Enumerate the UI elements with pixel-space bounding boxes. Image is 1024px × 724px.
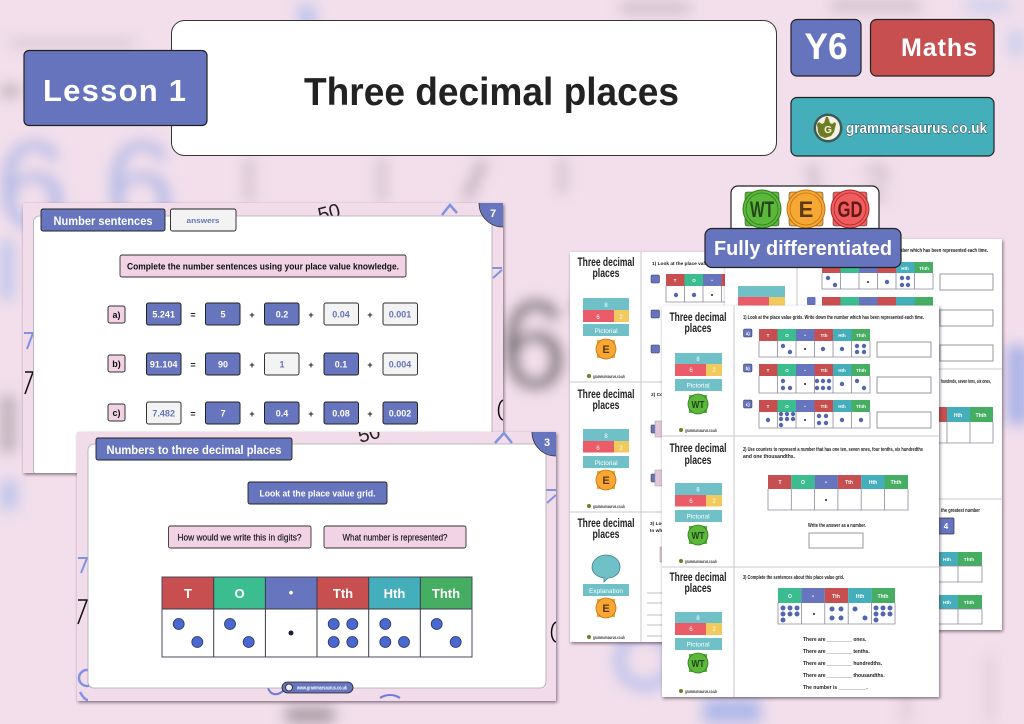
title panel <box>172 20 776 156</box>
section 1 sidebar: Pictorial <box>594 328 618 335</box>
number sentence a: 0.2 <box>276 310 288 320</box>
number sentence b: b) <box>112 359 121 369</box>
grid a: Hth <box>838 333 846 338</box>
number sentence b: + <box>249 360 255 370</box>
grid b: T <box>767 368 770 373</box>
section 1 sidebar: WT <box>692 399 705 411</box>
number sentence a: + <box>308 310 314 320</box>
icon: dinosaur footprint logo <box>814 114 842 142</box>
grid a: Hth <box>901 266 909 271</box>
worksheet grid a fragment: T <box>674 278 677 283</box>
section 2 sidebar <box>578 389 634 509</box>
section 1 sidebar: Three decimal <box>578 257 634 269</box>
counters <box>173 618 461 648</box>
badge: GD: GD <box>838 197 862 222</box>
section 1 sidebar: E <box>602 344 610 356</box>
grid a: a) <box>746 331 750 336</box>
section 3 sidebar: WT <box>692 658 705 670</box>
grid c: • <box>804 404 806 409</box>
badge: WT <box>743 190 781 228</box>
number sentence b: 0.004 <box>389 360 411 370</box>
slide white area <box>34 216 492 476</box>
grid b: Thth <box>856 368 866 373</box>
visible question fragments <box>647 261 725 636</box>
section 2 sidebar: Three decimal <box>578 389 634 401</box>
number sentence b: 90 <box>218 360 228 370</box>
section 2 sidebar <box>670 441 726 564</box>
question 2 text <box>743 447 923 460</box>
section 3 sidebar: Three decimal <box>670 570 726 584</box>
grid question 2: Hth <box>869 480 877 486</box>
grid a <box>744 329 931 357</box>
section 3 sidebar: 6 <box>689 627 693 633</box>
section 3 sidebar: E <box>602 603 610 615</box>
answers tab: answers <box>186 216 220 225</box>
place value grid <box>162 577 472 657</box>
section 2 sidebar: grammarsaurus.co.uk <box>685 559 717 564</box>
number sentence b: 91.104 <box>150 360 177 370</box>
question 3 text: 3) Complete the sentences about this place value grid. <box>743 575 844 581</box>
number sentence a: 0.04 <box>332 310 350 320</box>
question 2 text: and one thousandths. <box>743 454 796 460</box>
icon: dinosaur footprint logo: G <box>824 125 832 136</box>
number sentence c: 7 <box>220 408 226 418</box>
number sentence b: + <box>308 360 314 370</box>
grid a: Thth <box>856 333 866 338</box>
grid c <box>744 400 931 428</box>
number sentence a: 0.001 <box>389 310 411 320</box>
slide number: 7 <box>490 208 496 220</box>
section 2 sidebar: 6 <box>596 446 600 452</box>
grid b: Tth <box>820 368 828 373</box>
section 3 sidebar: places <box>684 581 712 595</box>
answers tab <box>170 209 236 231</box>
background: blurred numerals: 67 <box>500 276 635 415</box>
lesson label: Lesson 1 <box>43 73 186 108</box>
place value grid: • <box>289 585 294 600</box>
section 3 sidebar: Pictorial <box>686 642 710 648</box>
worksheet grid a fragment: • <box>711 278 713 283</box>
number sentence a: + <box>249 310 255 320</box>
answer prompt and box <box>808 523 866 548</box>
number sentence b: 1 <box>279 360 285 370</box>
grid b: b) <box>746 366 750 371</box>
place value grid: O <box>234 586 245 601</box>
section 1 sidebar: grammarsaurus.co.uk <box>685 428 717 433</box>
number sentence c: + <box>367 409 373 419</box>
question: digits <box>168 526 311 548</box>
worksheet: back left, expected <box>570 252 800 642</box>
instruction: Complete the number sentences using your place value knowledge. <box>127 262 399 272</box>
section 3 sidebar: places <box>592 529 620 541</box>
grid a: T <box>767 333 770 338</box>
section 2 sidebar: Pictorial <box>594 460 618 467</box>
worksheet grid a fragment: O <box>692 278 696 283</box>
grid a: • <box>804 333 806 338</box>
footer website pill: www.grammarsaurus.co.uk <box>296 686 347 692</box>
lesson label <box>24 50 207 126</box>
sentences to complete: There are _________ ones. <box>803 637 867 643</box>
section 2 sidebar: 8 <box>604 434 608 440</box>
section 1 sidebar: 2 <box>712 368 716 374</box>
subject badge <box>870 20 994 76</box>
grid a: O <box>785 333 789 338</box>
grid b: Hth <box>838 368 846 373</box>
grid b <box>744 364 931 393</box>
badge: WT: WT <box>750 197 774 222</box>
number sentence c: 0.4 <box>276 408 288 418</box>
question 2 text fragment: hundreds, seven tens, six ones, <box>941 379 991 385</box>
section 1 sidebar: 6 <box>689 368 693 374</box>
label: fully differentiated <box>705 228 901 268</box>
number sentence a: 5 <box>220 310 226 320</box>
number sentence b <box>108 353 418 375</box>
slide: number sentences <box>22 202 506 477</box>
sentences to complete <box>803 637 885 691</box>
number sentence c: = <box>190 409 196 419</box>
number sentence c: + <box>308 409 314 419</box>
section 1 sidebar <box>578 257 634 379</box>
number sentence b: + <box>367 360 373 370</box>
instruction <box>120 255 406 277</box>
grid question 2: Thth <box>891 480 901 486</box>
website badge <box>791 98 994 156</box>
question: digits: How would we write this in digits? <box>178 532 302 544</box>
grid c: c) <box>746 402 750 407</box>
section 2 sidebar: WT <box>692 530 705 542</box>
grid question 2 fragment <box>936 407 993 443</box>
section 2 sidebar: places <box>684 453 712 467</box>
question 2 text: 2) Use counters to represent a number that has one ten, seven ones, four tenths, six hundredths <box>743 447 923 453</box>
grid question 2 fragment: Thth <box>976 413 986 419</box>
section 1 sidebar: 8 <box>604 303 608 309</box>
partial sidebar bars <box>738 286 785 306</box>
section 1 sidebar: 6 <box>596 315 600 321</box>
section 1 sidebar: 8 <box>696 357 700 363</box>
grid question 2 fragment: Hth <box>954 413 962 419</box>
grid a: Thth <box>919 266 929 271</box>
slide border numerals <box>78 421 556 700</box>
year badge: Y6 <box>804 26 848 67</box>
sentences to complete: There are _________ hundredths. <box>803 661 883 667</box>
number sentence c: 0.002 <box>389 408 411 418</box>
icon: speech bubble <box>592 555 620 582</box>
question 1 text: 1) Look at the place value grids. Write down the number which has been represented each time. <box>798 248 989 254</box>
prompt: look at the grid <box>248 482 387 504</box>
grid b: O <box>785 368 789 373</box>
section 3 sidebar: Explanation <box>589 588 623 595</box>
slide number <box>532 432 556 456</box>
section 1 sidebar: places <box>684 321 712 335</box>
section 2 sidebar: Pictorial <box>686 514 710 520</box>
worksheet: front, working towards <box>662 306 939 697</box>
number sentence a: = <box>190 310 196 320</box>
section 2 sidebar: grammarsaurus.co.uk <box>593 504 625 509</box>
grid fragments question 3: Thth <box>964 557 974 563</box>
background: blurred numerals: 6.6 <box>0 116 176 255</box>
number sentence a <box>108 303 418 325</box>
section 3 sidebar: grammarsaurus.co.uk <box>593 635 625 640</box>
section 2 sidebar: 2 <box>712 499 716 505</box>
grid question 3: O <box>788 594 792 600</box>
visible question fragments: 1) Look at the place value grids. <box>652 261 725 267</box>
digit card 4 <box>936 518 954 534</box>
heading: numbers to three decimal places <box>96 438 292 460</box>
number sentence c: + <box>249 409 255 419</box>
section 2 sidebar: E <box>602 475 610 487</box>
grid a: Tth <box>820 333 828 338</box>
grid question 3: Thth <box>878 594 888 600</box>
number sentence b: 0.1 <box>335 360 347 370</box>
slide border numerals <box>24 200 503 420</box>
section 2 sidebar: 6 <box>689 499 693 505</box>
subject badge: Maths <box>901 34 977 62</box>
heading: number sentences: Number sentences <box>54 214 153 228</box>
grid fragments question 3: Hth <box>943 557 951 563</box>
label: fully differentiated: Fully differentiated <box>714 238 892 260</box>
worksheet grid a fragment <box>666 274 726 302</box>
slide border numerals: 50 <box>356 421 383 448</box>
grid question 3 <box>778 588 895 624</box>
grid question 2: • <box>825 480 827 486</box>
section 2 sidebar: 2 <box>619 446 623 452</box>
answer prompt and box: Write the answer as a number. <box>808 523 866 529</box>
grid question 2 <box>768 475 908 510</box>
grid question 2: Tth <box>845 480 853 486</box>
section 3 sidebar <box>578 518 634 640</box>
section 1 sidebar: Pictorial <box>686 382 710 390</box>
place value grid: Thth <box>432 586 460 601</box>
section 1 sidebar: 2 <box>619 315 623 321</box>
section 3 sidebar <box>670 570 726 694</box>
grid fragments question 3 <box>936 552 982 624</box>
grid fragments question 3: Hth <box>943 600 951 606</box>
visible question fragments: In which <box>650 528 669 534</box>
number sentence b: = <box>190 360 196 370</box>
number sentence c: c) <box>112 408 121 418</box>
grid question 2: O <box>801 480 805 486</box>
prompt: look at the grid: Look at the place value grid. <box>260 488 376 500</box>
place value grid: Tth <box>333 586 353 601</box>
sentences to complete: There are _________ tenths. <box>803 649 870 655</box>
question: number represented <box>324 526 466 548</box>
year badge <box>791 20 861 76</box>
section 1 sidebar <box>670 310 726 433</box>
grid fragments question 3: Thth <box>964 600 974 606</box>
question 1 text: 1) Look at the place value grids. Write down the number which has been represented each time. <box>743 315 924 321</box>
number sentence a: a) <box>112 310 121 320</box>
section 1 sidebar: grammarsaurus.co.uk <box>593 374 625 379</box>
visible question fragments: 2) Complete <box>651 392 679 398</box>
section 1 sidebar: places <box>592 268 620 280</box>
question: number represented: What number is represented? <box>342 532 448 544</box>
number sentence c <box>108 402 418 424</box>
slide: numbers to three decimal places <box>76 431 560 705</box>
worksheet: back right <box>725 239 1002 630</box>
grid question 3: Tth <box>832 594 840 600</box>
grid c: O <box>785 404 789 409</box>
grid b: • <box>804 368 806 373</box>
digit card 4: 4 <box>944 522 949 531</box>
section 3 sidebar: 2 <box>712 627 716 633</box>
section 2 sidebar: places <box>592 400 620 412</box>
badge: E: E <box>799 197 813 222</box>
grid c: Tth <box>820 404 828 409</box>
grid a <box>807 260 933 289</box>
heading: number sentences <box>41 209 165 231</box>
number sentence c: 0.08 <box>332 408 350 418</box>
section 1 sidebar: Three decimal <box>670 310 726 324</box>
section 2 sidebar: Three decimal <box>670 441 726 455</box>
badge: GD <box>831 190 869 228</box>
number sentence c: 7.482 <box>152 408 175 418</box>
number sentence a: + <box>367 310 373 320</box>
question 3 text fragment: the greatest number <box>941 508 980 514</box>
grid b header <box>807 297 933 308</box>
slide number: 3 <box>544 437 550 449</box>
place value grid: Hth <box>384 586 405 601</box>
grid c: Thth <box>856 404 866 409</box>
website badge: grammarsaurus.co.uk <box>846 120 988 137</box>
visible question fragments: 3) Look <box>650 521 667 527</box>
sentences to complete: There are _________ thousandths. <box>803 673 885 679</box>
slide white area <box>88 444 546 688</box>
badge: E <box>787 190 825 228</box>
grid question 2: T <box>778 480 782 486</box>
number sentence a: 5.241 <box>152 310 175 320</box>
background: blurred numerals: 12 <box>800 155 890 211</box>
slide number <box>478 203 503 228</box>
sentences to complete: The number is __________. <box>803 685 868 691</box>
place value grid: T <box>184 586 192 601</box>
grid question 3: • <box>812 594 814 600</box>
badge panel: WT E GD <box>731 186 879 236</box>
answer boxes <box>940 274 993 361</box>
grid question 3: Hth <box>856 594 864 600</box>
slide border numerals: 50 <box>316 200 343 227</box>
footer website pill <box>282 682 353 693</box>
grid c: T <box>767 404 770 409</box>
grid c: Hth <box>838 404 846 409</box>
section 3 sidebar: Three decimal <box>578 518 634 530</box>
section 3 sidebar: 8 <box>696 616 700 622</box>
section 2 sidebar: 8 <box>696 488 700 494</box>
heading: numbers to three decimal places: Numbers to three decimal places <box>106 443 282 457</box>
title text: Three decimal places <box>304 71 679 114</box>
section 3 sidebar: grammarsaurus.co.uk <box>685 689 717 694</box>
